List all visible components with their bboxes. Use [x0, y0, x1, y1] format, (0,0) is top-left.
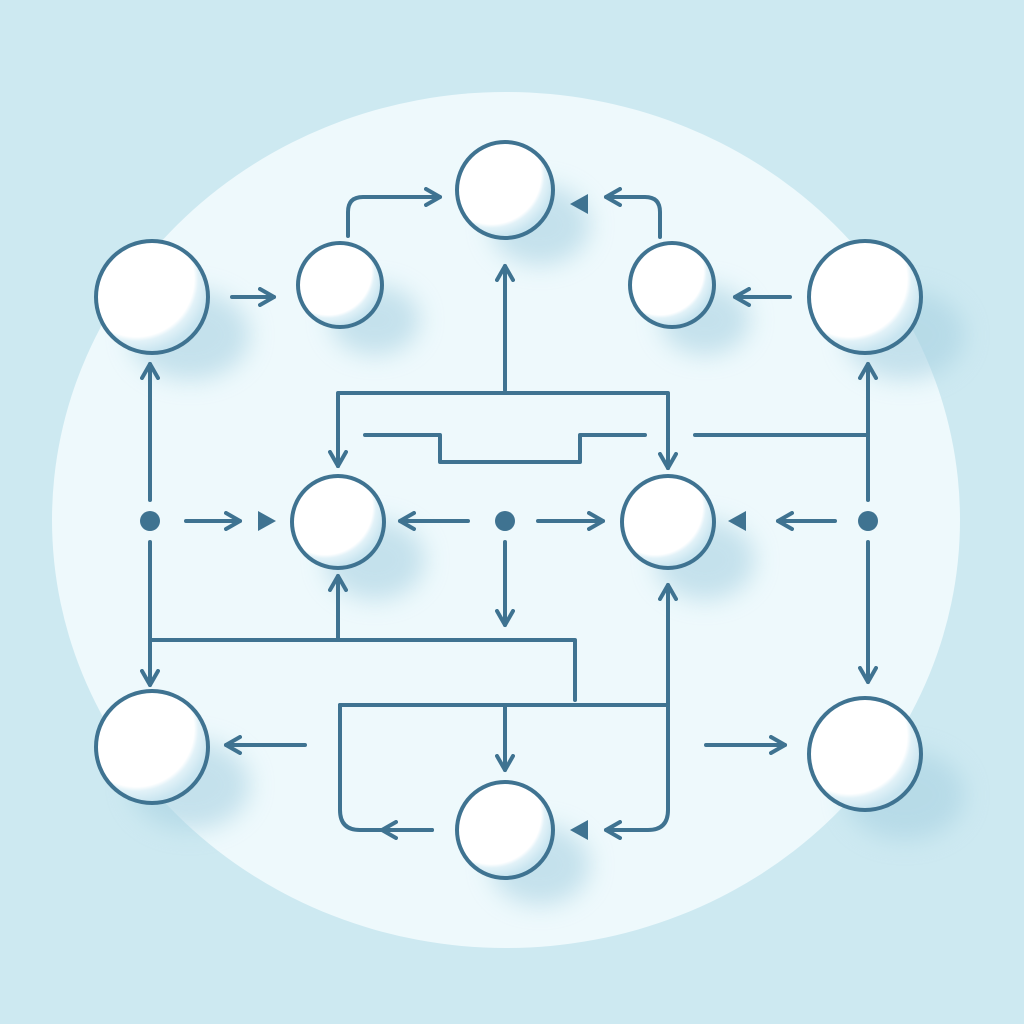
dots [140, 511, 878, 531]
triangles [258, 194, 746, 840]
shadows [130, 185, 965, 905]
connectors [150, 197, 868, 830]
nodes [96, 142, 921, 878]
background circle [52, 92, 960, 948]
